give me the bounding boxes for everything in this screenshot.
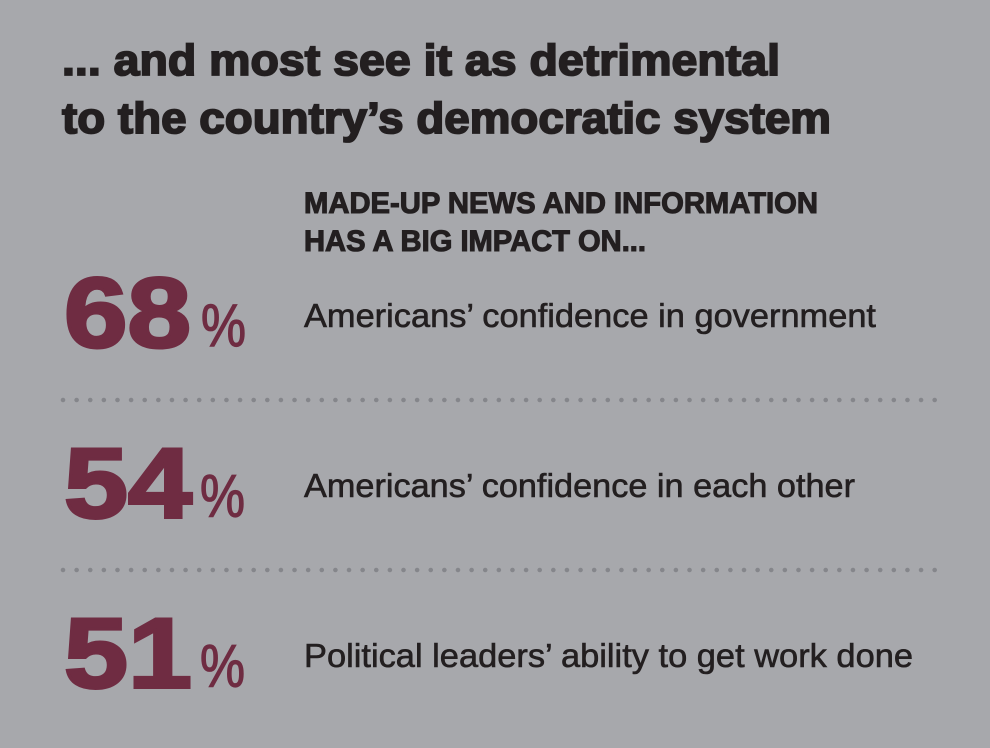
statistic: 68 percent: 68 bbox=[64, 257, 191, 368]
title: to the country’s democratic system bbox=[62, 94, 831, 143]
subheading: HAS A BIG IMPACT ON... bbox=[304, 225, 646, 258]
statistic: 54 percent: % bbox=[200, 462, 245, 530]
row: political leaders bbox=[64, 598, 913, 708]
statistic: 51 percent bbox=[64, 598, 245, 708]
subheading bbox=[304, 187, 818, 258]
statistic: 51 percent: 51 bbox=[64, 598, 192, 708]
statistic: 54 percent: 54 bbox=[64, 428, 192, 538]
label: confidence in each other: Americans’ confidence in each other bbox=[304, 468, 855, 505]
statistic: 54 percent bbox=[64, 428, 245, 538]
title bbox=[62, 36, 831, 143]
row: confidence in government bbox=[64, 257, 877, 368]
statistic: 68 percent: % bbox=[201, 292, 246, 359]
label: political leaders: Political leaders’ ability to get work done bbox=[304, 638, 913, 675]
label: confidence in government: Americans’ confidence in government bbox=[304, 298, 877, 335]
statistic: 51 percent: % bbox=[200, 632, 245, 700]
subheading: MADE-UP NEWS AND INFORMATION bbox=[304, 187, 818, 220]
title: ... and most see it as detrimental bbox=[62, 36, 780, 85]
row: confidence in each other bbox=[64, 428, 855, 538]
statistic: 68 percent bbox=[64, 257, 246, 368]
